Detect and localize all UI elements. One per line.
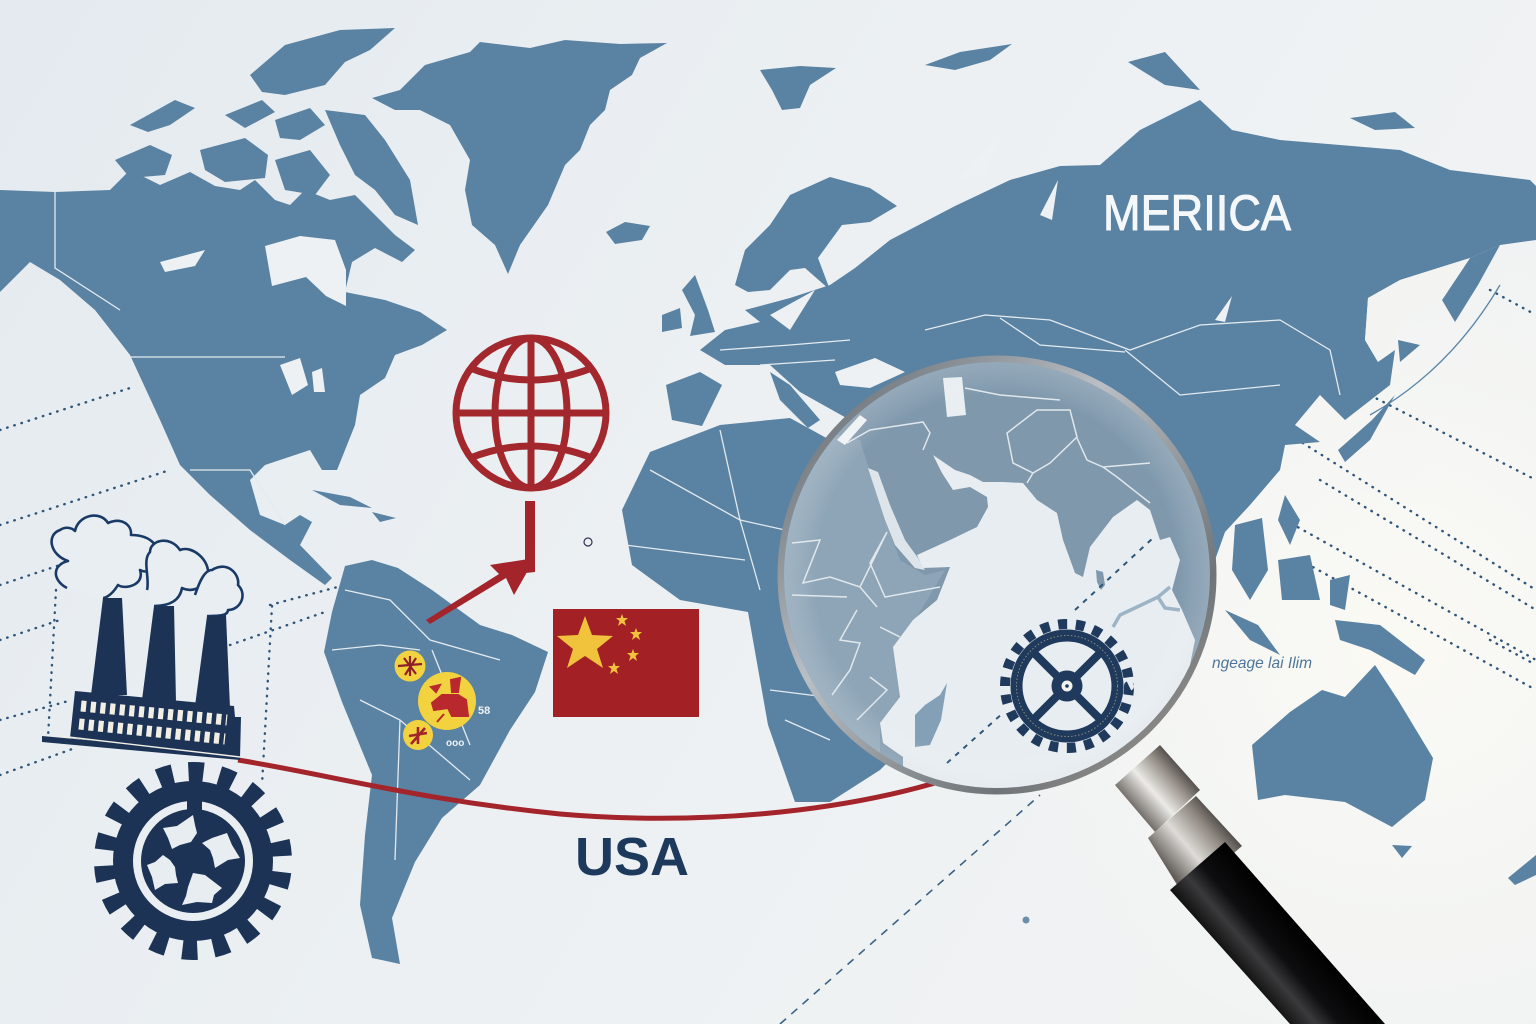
landmass: Italy bbox=[770, 372, 820, 428]
landmass: Caribbean bbox=[312, 490, 396, 522]
arrow bbox=[426, 501, 535, 624]
landmass: UK and Ireland bbox=[662, 275, 715, 336]
landmass: North America bbox=[0, 170, 447, 585]
dashed line to the bottom bbox=[780, 795, 1040, 1024]
gear inner segments bbox=[147, 815, 240, 905]
lens gear icon bbox=[1005, 624, 1129, 748]
map label: MERIICA: MERIICA bbox=[1103, 185, 1292, 241]
landmass: Kamchatka bbox=[1442, 245, 1500, 322]
landmass: South America bbox=[324, 560, 548, 964]
chimneys bbox=[91, 598, 230, 708]
lens content bbox=[784, 362, 1210, 788]
lens: river to the east bbox=[1113, 587, 1180, 627]
country borders bbox=[55, 192, 1340, 860]
marker labels bbox=[446, 705, 490, 749]
lens: edge glare bbox=[837, 415, 867, 445]
handle bbox=[1115, 745, 1385, 1024]
inland water and bays bbox=[160, 135, 1470, 395]
landmass: Europe and Asia bbox=[700, 100, 1536, 590]
small map dot bbox=[1022, 916, 1030, 924]
magnifying glass bbox=[770, 350, 1385, 1024]
lens: borders bbox=[792, 388, 1150, 720]
small map label: Oceania: ngeage lai Ilim bbox=[1212, 655, 1312, 672]
lens: Sri Lanka bbox=[1096, 570, 1105, 590]
lens: lighter land to the west bbox=[784, 435, 944, 753]
marker labels: 58 bbox=[478, 705, 490, 717]
factory building bbox=[70, 691, 241, 758]
large gear icon bbox=[100, 768, 286, 954]
landmass: Southeast Asia and Indonesia bbox=[1225, 495, 1425, 675]
lens rim bbox=[781, 359, 1213, 791]
resource markers on South America bbox=[394, 650, 490, 750]
marker: small bottom bbox=[403, 720, 433, 750]
landmass: Tasmania and New Zealand bbox=[1392, 845, 1536, 885]
landmass: Greenland bbox=[372, 40, 667, 274]
landmass: Australia bbox=[1252, 665, 1433, 827]
lens: dotted route bbox=[947, 538, 1153, 763]
landmass: Svalbard bbox=[760, 66, 836, 110]
landmass: Iceland bbox=[606, 222, 650, 244]
landmass: Japan bbox=[1338, 340, 1420, 462]
landmass: Arctic Russia islands bbox=[925, 44, 1415, 130]
marker labels: ooo bbox=[446, 738, 464, 749]
USA label: USA bbox=[575, 827, 689, 887]
landmass: Scandinavia bbox=[735, 177, 897, 292]
landmass: Arctic islands bbox=[115, 28, 418, 225]
small map marker bbox=[584, 538, 592, 546]
flag of China bbox=[553, 609, 699, 717]
marker: large centre bbox=[418, 672, 476, 730]
windows bbox=[79, 706, 227, 739]
lens: Red Sea bbox=[868, 468, 925, 570]
dotted route lines bbox=[0, 290, 1536, 785]
landmass: Africa bbox=[622, 418, 950, 802]
factory base bbox=[42, 736, 240, 760]
globe icon bbox=[456, 338, 606, 488]
lens: glare strip bbox=[943, 377, 966, 417]
landmass: Iberia bbox=[666, 372, 722, 426]
red connecting curve bbox=[238, 760, 945, 818]
background glow bbox=[980, 220, 1536, 1024]
thin long line at far east bbox=[1370, 285, 1500, 415]
marker: small top bbox=[394, 650, 426, 682]
factory icon bbox=[42, 516, 243, 760]
smoke clouds bbox=[52, 516, 243, 616]
lens: Madagascar bbox=[915, 683, 947, 747]
lens: Indian Ocean bbox=[880, 455, 1195, 788]
